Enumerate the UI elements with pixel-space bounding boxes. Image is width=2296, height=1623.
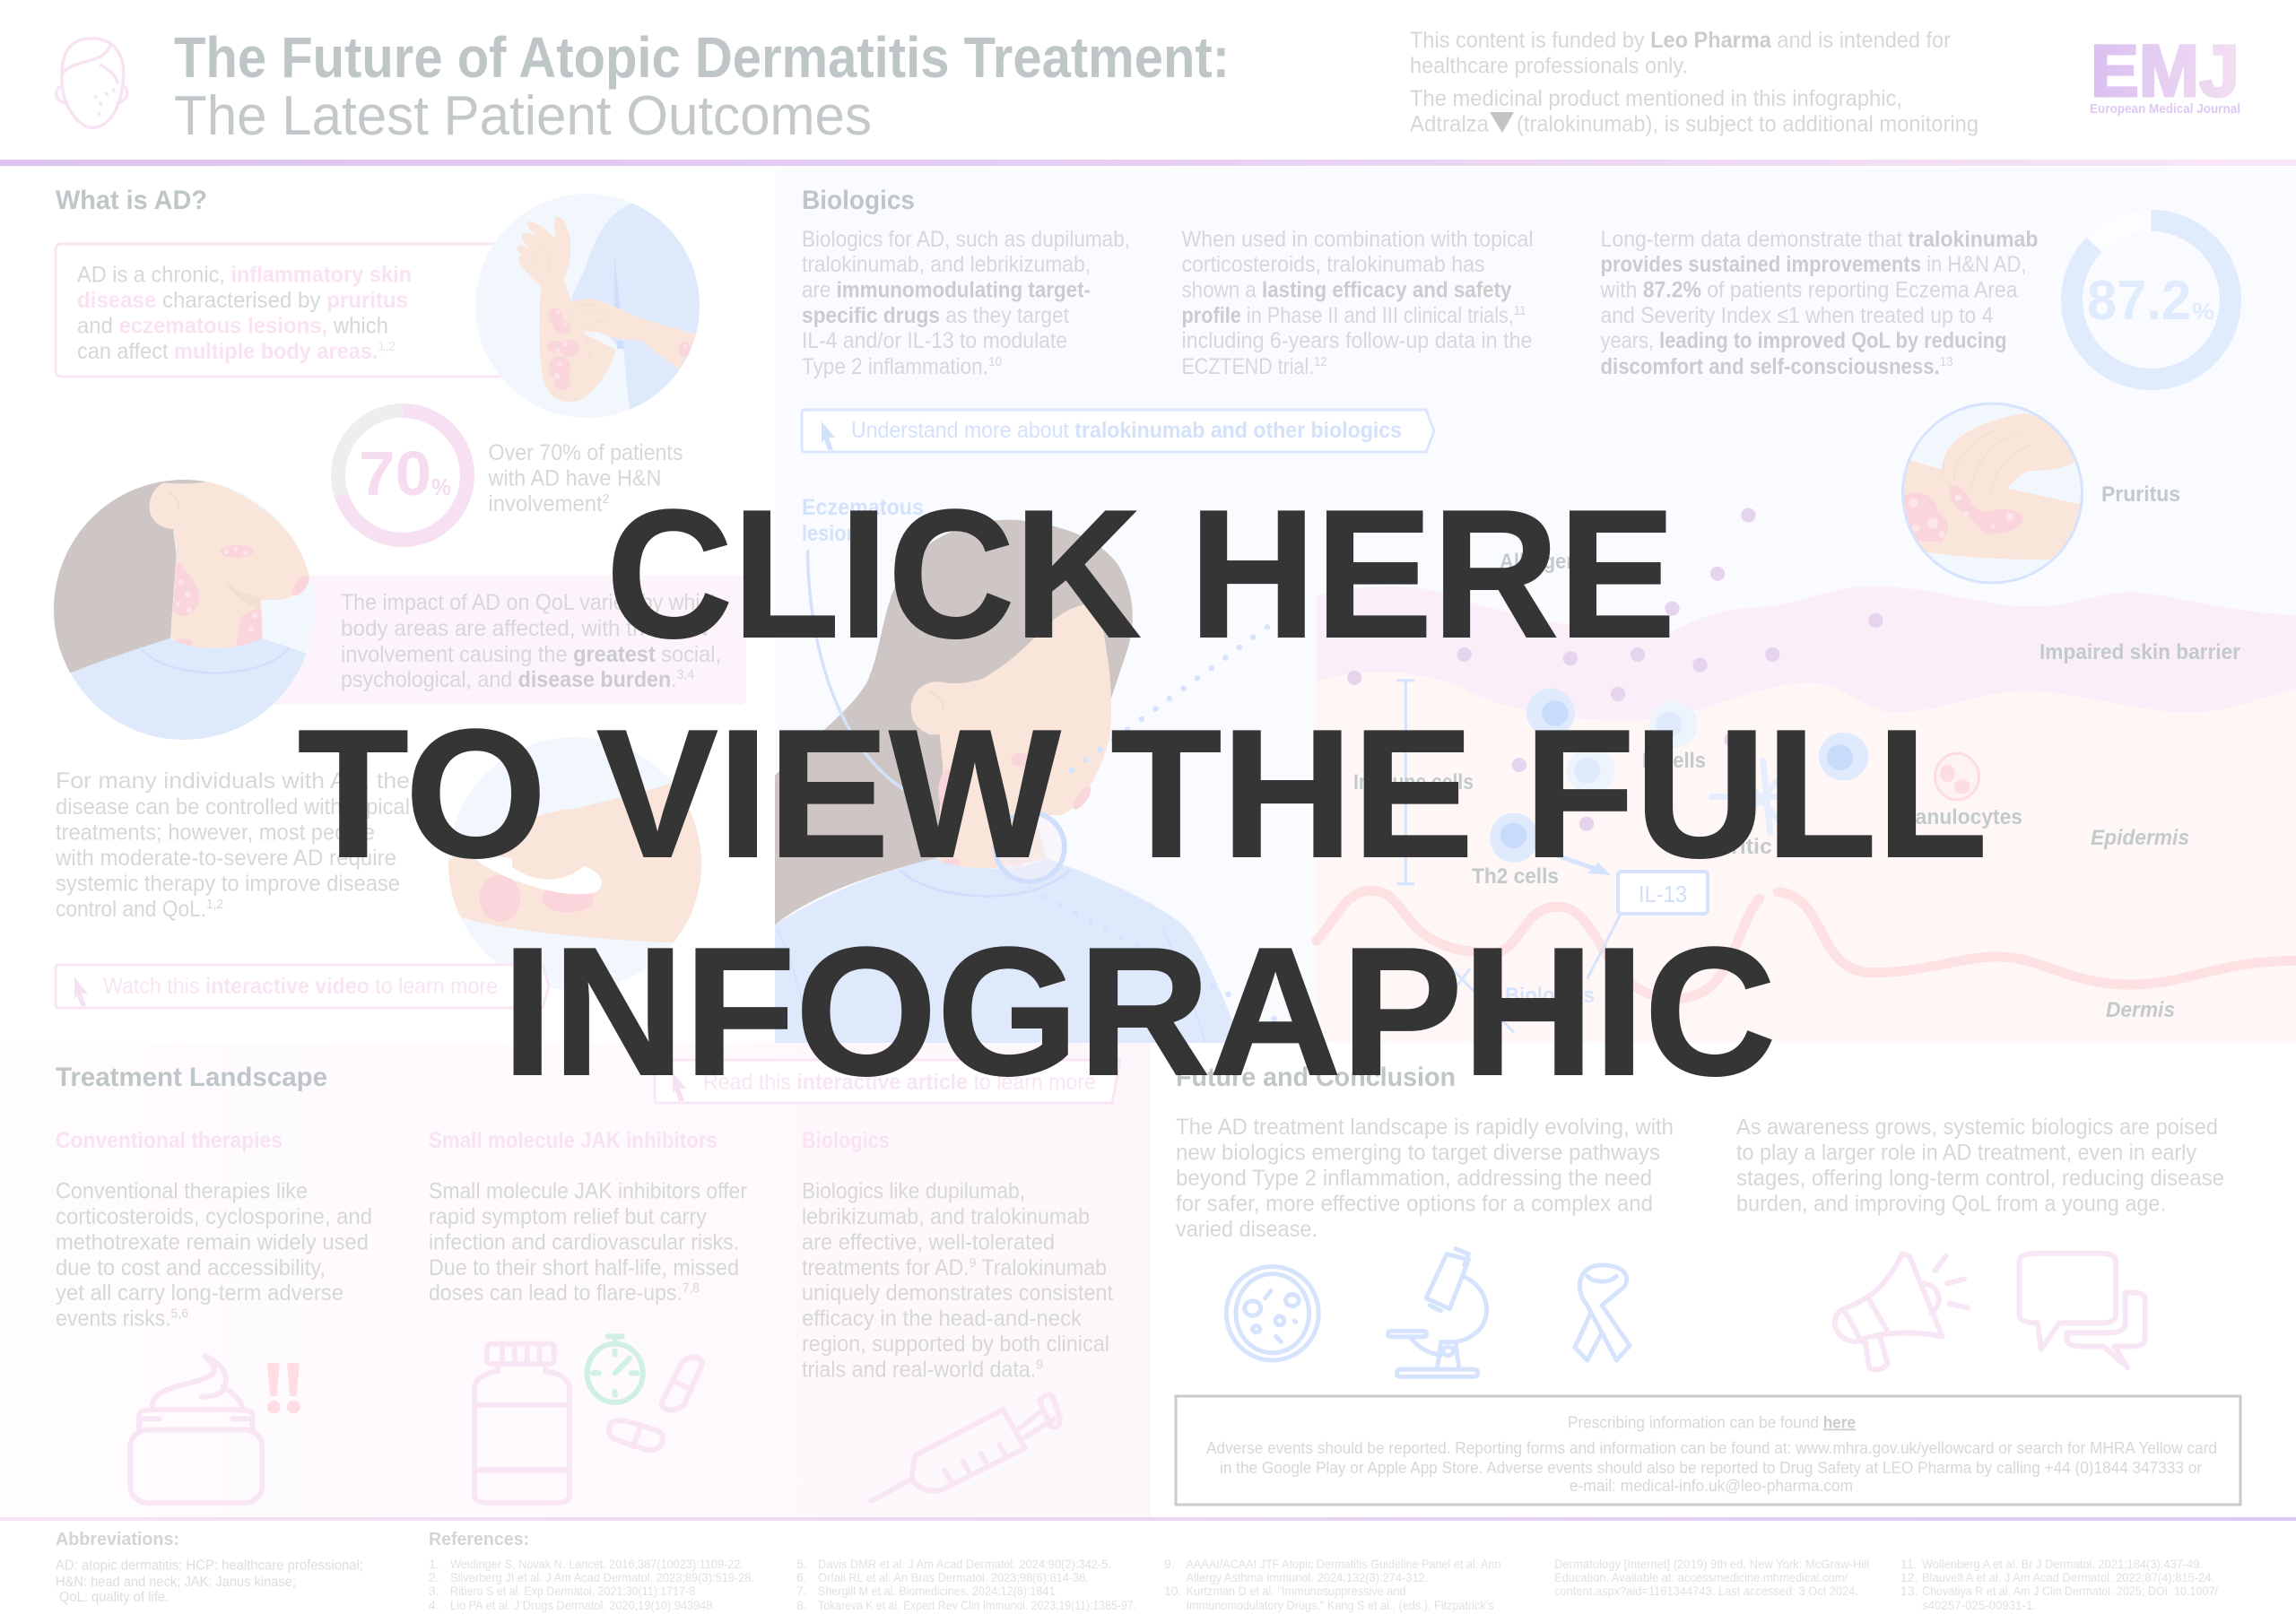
text: biologics column 1: specific drugs as they target — [802, 303, 1069, 328]
text: references: Davis DMR et al. J Am Acad Dermatol. 2024;90(2):342-5. — [818, 1557, 1111, 1571]
text: future column 1: varied disease. — [1176, 1217, 1318, 1242]
title: The Future of Atopic Dermatitis Treatment: — [174, 25, 1230, 90]
text: references: 11. — [1900, 1557, 1917, 1571]
text: abbreviations — [56, 1530, 363, 1605]
text: future column 1: beyond Type 2 inflammation, addressing the need — [1176, 1166, 1652, 1191]
chart: 87.2% donut: 87.2 — [2087, 270, 2191, 332]
text: biologics treatment: 9 — [970, 1255, 976, 1271]
callout: prescribing information: Prescribing information can be found here — [1568, 1413, 1856, 1431]
text: future column 1 — [1176, 1115, 1674, 1242]
text: future column 2 — [1736, 1115, 2224, 1216]
text: references: Kurtzman D et al. "Immunosuppressive and — [1186, 1584, 1406, 1598]
text: future column 1: The AD treatment landscape is rapidly evolving, with — [1176, 1115, 1674, 1140]
text: biologics treatment — [802, 1128, 1113, 1383]
text: references: 4. — [429, 1598, 439, 1612]
text: future column 2: As awareness grows, systemic biologics are poised — [1736, 1115, 2218, 1140]
label: IL-13 — [1618, 872, 1708, 914]
text: biologics treatment: treatments for AD. — [802, 1255, 982, 1280]
text: biologics column 2: 11 — [1514, 303, 1526, 318]
text: conventional therapies: Conventional therapies — [56, 1128, 283, 1153]
cell: B cell lower — [1567, 747, 1615, 794]
chart: 70% donut: 70 — [359, 438, 431, 508]
callout: AD definition box: 1,2 — [378, 339, 396, 354]
text: conventional therapies: methotrexate remain widely used — [56, 1230, 369, 1255]
text: systemic therapy paragraph: disease can be controlled with topical — [56, 794, 410, 820]
cell: Th2 right — [1819, 733, 1868, 781]
header funding text: The medicinal product mentioned in this infographic, — [1410, 86, 1902, 111]
overlay: click here call to action: CLICK HERE — [606, 473, 1675, 676]
text: biologics treatment: region, supported by both clinical — [802, 1332, 1109, 1357]
text: biologics column 2: shown a lasting efficacy and safety — [1182, 278, 1512, 303]
text: references: Wollenberg A et al. Br J Dermatol. 2021;184(3):437-49. — [1922, 1557, 2203, 1571]
text: biologics column 2: profile in Phase II and III clinical trials, — [1182, 303, 1555, 328]
overlay: click here call to action: TO VIEW THE FULL — [298, 692, 1987, 896]
text: biologics column 2 — [1182, 227, 1534, 379]
button: read interactive article: Read this interactive article to learn more — [703, 1070, 1096, 1095]
immune cell bracket — [1397, 681, 1414, 884]
illustration: skin layers — [1317, 508, 2296, 1043]
heading: What is AD?: What is AD? — [56, 186, 207, 215]
text: small molecule JAK inhibitors — [429, 1128, 747, 1306]
text: biologics column 3: 13 — [1940, 354, 1953, 369]
header funding text — [1410, 28, 1979, 136]
text: future column 2: stages, offering long-term control, reducing disease — [1736, 1166, 2224, 1191]
text: references: AAAAI/ACAAI JTF Atopic Dermatitis Guideline Panel et al. Ann — [1186, 1557, 1501, 1571]
text: 70% H&N involvement: involvement — [488, 491, 608, 516]
text: biologics column 1: are immunomodulating target- — [802, 278, 1091, 303]
button: watch interactive video: Watch this interactive video to learn more — [103, 974, 498, 999]
text: references: Lio PA et al. J Drugs Dermatol. 2020;19(10):943948. — [450, 1598, 716, 1612]
illustration: arm being treated — [443, 737, 707, 990]
text: biologics column 2: corticosteroids, tralokinumab has — [1182, 252, 1485, 277]
text: systemic therapy paragraph: systemic therapy to improve disease — [56, 872, 400, 897]
button: read interactive article — [655, 1060, 1120, 1103]
callout: AD definition box: can affect multiple body areas. — [77, 339, 391, 364]
title — [174, 25, 1230, 147]
text: small molecule JAK inhibitors: Due to their short half-life, missed — [429, 1255, 739, 1280]
allergen particles — [1347, 508, 1883, 831]
cell: dendritic — [1712, 760, 1792, 833]
text: references: Shergill M et al. Biomedicines. 2024;12(8):1841. — [818, 1584, 1058, 1598]
callout: QoL impact box: 3,4 — [677, 667, 694, 682]
icon: megaphone — [1835, 1254, 1968, 1369]
labels: pathway text — [1353, 482, 2240, 1022]
text: references: Weidinger S, Novak N. Lancet. 2016;387(10023):1109-22. — [450, 1557, 744, 1571]
text: biologics column 1: tralokinumab, and lebrikizumab, — [802, 252, 1091, 277]
text: references: Allergy Asthma Immunol. 2024;132(3):274-312. — [1186, 1570, 1428, 1584]
text: biologics column 1: Type 2 inflammation. — [802, 354, 1009, 379]
label: Pruritus illustration — [1899, 404, 2083, 583]
text: references: 6. — [796, 1570, 807, 1584]
button: watch interactive video — [56, 965, 549, 1008]
text: references: 2. — [429, 1570, 439, 1584]
chart: 70% donut: % — [431, 473, 451, 500]
dermis boundary — [1317, 890, 2296, 999]
text: references: Orfali RL et al. An Bras Dermatol. 2023;98(6):814-36. — [818, 1570, 1089, 1584]
icon: speech bubbles — [2019, 1254, 2145, 1367]
text: references: 3. — [429, 1584, 439, 1598]
text: references: Education. Available at: accessmedicine.mhmedical.com/ — [1554, 1570, 1848, 1584]
labels: pathway text: Pruritus — [2101, 482, 2180, 507]
text: references: 7. — [796, 1584, 807, 1598]
text: biologics treatment: Biologics like dupilumab, — [802, 1178, 1025, 1203]
text: 70% H&N involvement: 2 — [603, 491, 610, 507]
labels: pathway text: B cells — [1642, 749, 1706, 773]
text: systemic therapy paragraph: control and QoL. — [56, 897, 222, 922]
callout: QoL impact box: The impact of AD on QoL varies by which — [341, 590, 722, 615]
callout: QoL impact box: psychological, and disease burden. — [341, 667, 683, 692]
callout: AD definition box: disease characterised by pruritus — [77, 288, 408, 313]
icon: awareness ribbon — [1575, 1265, 1630, 1360]
text: references: Tokareva K et al. Expert Rev Clin Immunol. 2023;19(11):1385-97. — [818, 1598, 1136, 1612]
text: biologics column 1: IL-4 and/or IL-13 to modulate — [802, 328, 1067, 353]
callout: prescribing information: e-mail: medical-info.uk@leo-pharma.com — [1570, 1477, 1853, 1495]
labels: pathway text: Dendritic cells — [1675, 835, 1828, 859]
text: conventional therapies: due to cost and accessibility, — [56, 1255, 326, 1280]
logo: EMJ: EMJ — [2091, 30, 2239, 112]
text: conventional therapies: yet all carry long-term adverse — [56, 1280, 344, 1306]
text: biologics column 1: Biologics for AD, such as dupilumab, — [802, 227, 1130, 252]
icon: microscope — [1388, 1248, 1487, 1376]
text: references: 12. — [1900, 1570, 1918, 1584]
impaired skin barrier band — [1317, 586, 2296, 721]
chart: 87.2% donut — [2072, 221, 2231, 379]
text: references: Blauvelt A et al. J Am Acad Dermatol. 2022;87(4):815-24. — [1922, 1570, 2214, 1584]
title: The Latest Patient Outcomes — [174, 85, 872, 147]
labels: pathway text: Dermis — [2106, 998, 2175, 1022]
text: abbreviations: QoL: quality of life. — [59, 1590, 169, 1605]
text: biologics treatment: trials and real-world data. — [802, 1358, 1054, 1383]
cell: granulocyte — [1935, 753, 1979, 800]
text: biologics column 3: provides sustained improvements in H&N AD, — [1600, 252, 2027, 277]
label: Eczematous lesions with arrow: lesions — [802, 521, 869, 546]
logo: EMJ: European Medical Journal — [2090, 101, 2240, 117]
label: IL-13: IL-13 — [1639, 881, 1687, 907]
heading: Biologics: Biologics — [802, 186, 915, 215]
text: biologics treatment: Biologics — [802, 1128, 890, 1153]
panel: biologics background — [776, 168, 2296, 1043]
text: references: Ribero S et al. Exp Dermatol. 2021;30(11):1717-8 — [450, 1584, 695, 1598]
header funding text: (tralokinumab), is subject to additional monitoring — [1517, 111, 1979, 136]
callout: QoL impact box: involvement causing the greatest social, — [341, 642, 721, 667]
text: biologics column 2: ECZTEND trial. — [1182, 354, 1336, 379]
illustration: woman with eczema — [775, 520, 1241, 1044]
text: 70% H&N involvement: Over 70% of patients — [488, 440, 683, 465]
illustration: neck with eczema — [45, 471, 314, 740]
cell: Th2 lower — [1490, 813, 1538, 863]
icon: cream jar with warning — [130, 1356, 300, 1503]
overlay: click here call to action — [298, 473, 1987, 1114]
text: biologics column 1 — [802, 227, 1130, 379]
text: biologics treatment: are effective, well-tolerated — [802, 1230, 1055, 1255]
text: biologics column 2: including 6-years follow-up data in the — [1182, 328, 1532, 353]
text: small molecule JAK inhibitors: rapid symptom relief but carry — [429, 1204, 707, 1229]
heading: Treatment Landscape: Treatment Landscape — [56, 1063, 327, 1092]
labels: pathway text: Th2 cells — [1472, 864, 1559, 889]
text: systemic therapy paragraph: 1,2 — [206, 897, 223, 912]
text: references: 10. — [1164, 1584, 1181, 1598]
text: references: 8. — [796, 1598, 807, 1612]
button: understand more — [802, 410, 1434, 452]
header funding text: This content is funded by Leo Pharma and is intended for — [1410, 28, 1951, 53]
arrow: Th2 to IL-13 — [1541, 850, 1611, 875]
heading: Future and Conclusion: Future and Conclusion — [1176, 1063, 1456, 1092]
text: future column 2: to play a larger role in AD treatment, even in early — [1736, 1141, 2196, 1166]
text: references: 13. — [1900, 1584, 1918, 1598]
icon: petri dish — [1226, 1266, 1318, 1360]
callout: AD definition box: and eczematous lesions, which — [77, 314, 388, 339]
text: conventional therapies: Conventional therapies like — [56, 1178, 308, 1203]
labels: pathway text: Immune cells — [1353, 770, 1474, 794]
text: future column 1: for safer, more effective options for a complex and — [1176, 1191, 1653, 1216]
text: references — [429, 1530, 2218, 1612]
text: references: References: — [429, 1530, 529, 1549]
text: future column 2: burden, and improving QoL from a young age. — [1736, 1191, 2166, 1216]
text: biologics treatment: efficacy in the head-and-neck — [802, 1306, 1082, 1331]
text: small molecule JAK inhibitors: doses can lead to flare-ups. — [429, 1280, 704, 1306]
cell: Th2 upper — [1526, 689, 1575, 736]
dotted connectors — [1030, 608, 1293, 1021]
callout: AD definition box — [56, 244, 522, 377]
icon: syringe — [871, 1394, 1060, 1501]
text: biologics column 1: 10 — [988, 354, 1002, 369]
labels: pathway text: Granulocytes — [1892, 805, 2022, 829]
callout: prescribing information: Adverse events should be reported. Reporting forms and information can be found at: www.mhra.gov.uk/yellowcard or search for MHRA Yellow card — [1206, 1439, 2217, 1457]
text: biologics treatment: 9 — [1036, 1358, 1043, 1372]
header rule — [0, 160, 2296, 166]
chart: 70% donut — [338, 411, 467, 540]
overlay: click here call to action: INFOGRAPHIC — [502, 910, 1776, 1114]
icon: face with eczema — [57, 39, 127, 127]
text: small molecule JAK inhibitors: 7,8 — [683, 1280, 700, 1296]
illustration: arm with eczema — [475, 194, 706, 418]
labels: pathway text: Impaired skin barrier — [2039, 640, 2240, 664]
text: systemic therapy paragraph: treatments; however, most people — [56, 820, 375, 845]
header funding text: Adtralza — [1410, 111, 1489, 136]
callout: QoL impact box: body areas are affected, with the H&N — [341, 616, 709, 641]
text: small molecule JAK inhibitors: Small molecule JAK inhibitors — [429, 1128, 718, 1153]
callout: QoL impact box — [269, 576, 746, 705]
callout: AD definition box: AD is a chronic, inflammatory skin — [77, 262, 412, 287]
icon: pill bottle, stopwatch and capsules — [474, 1336, 702, 1503]
text: small molecule JAK inhibitors: infection and cardiovascular risks. — [429, 1230, 739, 1255]
epidermis — [1317, 586, 2296, 1043]
header funding text: healthcare professionals only. — [1410, 54, 1688, 79]
chart: 87.2% donut: % — [2192, 298, 2214, 325]
text: systemic therapy paragraph: with moderate-to-severe AD require — [55, 846, 396, 871]
text: biologics column 3: with 87.2% of patients reporting Eczema Area — [1600, 278, 2018, 303]
text: small molecule JAK inhibitors: Small molecule JAK inhibitors offer — [429, 1178, 747, 1203]
text: systemic therapy paragraph — [55, 768, 410, 922]
text: biologics column 2: 12 — [1314, 354, 1327, 369]
text: references: Dermatology [Internet] (2019) 9th ed, New York: McGraw-Hill — [1554, 1557, 1869, 1571]
label: Eczematous lesions with arrow: Eczematous — [802, 495, 924, 520]
text: conventional therapies — [56, 1128, 372, 1331]
callout: prescribing information — [1176, 1396, 2240, 1505]
text: 70% H&N involvement: with AD have H&N — [488, 466, 662, 491]
text: systemic therapy paragraph: For many individuals with AD, the — [56, 768, 410, 794]
text: abbreviations: AD: atopic dermatitis; HCP: healthcare professional; — [56, 1558, 363, 1573]
text: biologics treatment: uniquely demonstrates consistent — [802, 1280, 1113, 1306]
text: references: Chovatiya R et al. Am J Clin Dermatol. 2025; DOI: 10.1007/ — [1922, 1584, 2218, 1598]
labels: pathway text: Epidermis — [2091, 826, 2189, 850]
labels: pathway text: Biologics — [1505, 984, 1595, 1008]
text: biologics column 2: When used in combination with topical — [1182, 227, 1534, 252]
text: biologics column 3: discomfort and self-consciousness. — [1600, 354, 1940, 379]
text: references: s40257-025-00931-1. — [1922, 1598, 2036, 1612]
panel: treatment landscape background — [0, 1043, 1151, 1518]
label: Eczematous lesions with arrow — [802, 495, 925, 801]
text: abbreviations: H&N: head and neck; JAK: Janus kinase; — [56, 1575, 296, 1590]
labels: pathway text: Allergens — [1500, 550, 1589, 574]
text: biologics column 3 — [1600, 227, 2038, 379]
text: conventional therapies: 5,6 — [171, 1306, 188, 1322]
text: references: Immunomodulatory Drugs," Kang S et al., (eds.), Fitzpatrick's — [1186, 1598, 1494, 1612]
cell: B cell upper — [1649, 701, 1698, 748]
text: abbreviations: Abbreviations: — [56, 1530, 179, 1549]
text: future column 1: new biologics emerging to target diverse pathways — [1176, 1141, 1660, 1166]
text: biologics column 3: Long-term data demonstrate that tralokinumab — [1600, 227, 2038, 252]
text: biologics treatment: Tralokinumab — [976, 1255, 1107, 1280]
biologics connector and antibody — [1448, 915, 1621, 1033]
text: biologics column 3: years, leading to improved QoL by reducing — [1600, 328, 2007, 353]
text: conventional therapies: corticosteroids, cyclosporine, and — [56, 1204, 372, 1229]
text: references: Silverberg JI et al. J Am Acad Dermatol. 2023;89(3):519-28. — [450, 1570, 754, 1584]
footer rule — [0, 1517, 2296, 1521]
button: understand more: Understand more about tralokinumab and other biologics — [851, 418, 1402, 443]
text: references: content.aspx?aid=1161344743. Last accessed: 3 Oct 2024. — [1554, 1584, 1858, 1598]
text: references: 5. — [796, 1557, 807, 1571]
text: conventional therapies: events risks. — [56, 1306, 180, 1331]
text: references: 1. — [429, 1557, 439, 1571]
text: references: 9. — [1164, 1557, 1175, 1571]
callout: prescribing information: in the Google Play or Apple App Store. Adverse events should also be reported to Drug Safety at LEO Pharma by calling +44 (0)1844 347333 or — [1220, 1459, 2202, 1477]
text: biologics column 3: and Severity Index ≤1 when treated up to 4 — [1600, 303, 1994, 328]
text: biologics treatment: lebrikizumab, and tralokinumab — [802, 1204, 1090, 1229]
text: 70% H&N involvement — [488, 440, 683, 516]
